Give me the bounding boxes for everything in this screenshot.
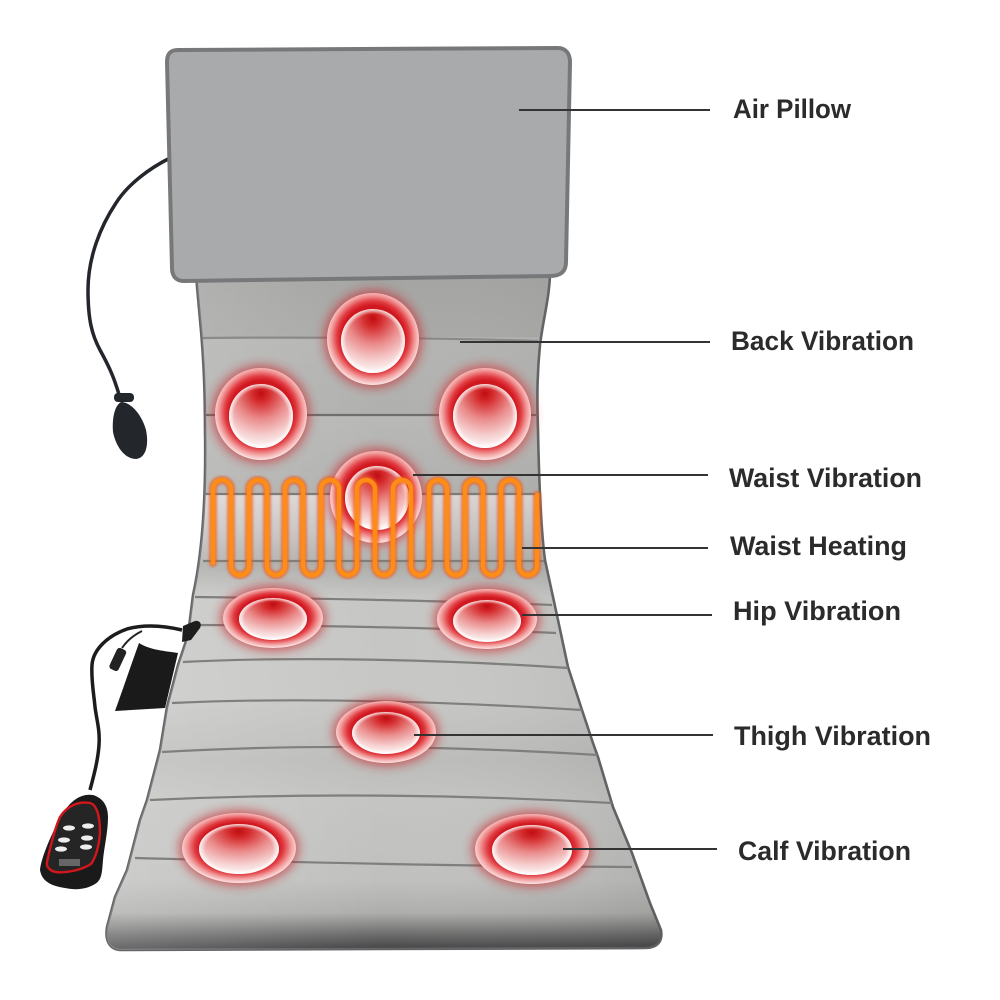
vibration zone: calf right [472, 811, 592, 887]
cable connector on mat [182, 621, 201, 642]
label: Air Pillow: Air Pillow [733, 94, 852, 124]
vibration zone: back left [212, 365, 310, 463]
label: Calf Vibration: Calf Vibration [738, 836, 911, 866]
air hose and pump bulb [88, 158, 170, 459]
label: Waist Vibration: Waist Vibration [729, 463, 922, 493]
vibration zone: thigh [333, 698, 439, 766]
heating coil [213, 480, 537, 575]
label: Waist Heating: Waist Heating [730, 531, 907, 561]
pouch and cables [90, 626, 182, 790]
label: Hip Vibration: Hip Vibration [733, 596, 901, 626]
vibration zone: calf left [179, 810, 299, 886]
label: Thigh Vibration: Thigh Vibration [734, 721, 931, 751]
seam lines [135, 338, 632, 867]
air pillow [167, 48, 570, 281]
vibration zone: hip right [434, 586, 540, 652]
label: Back Vibration: Back Vibration [731, 326, 914, 356]
vibration zone: back right [436, 365, 534, 463]
vibration zone: waist [327, 448, 425, 546]
vibration zone: back centre [324, 290, 422, 388]
remote control [40, 795, 108, 889]
mat body [107, 275, 661, 950]
vibration zone: hip left [220, 585, 326, 651]
